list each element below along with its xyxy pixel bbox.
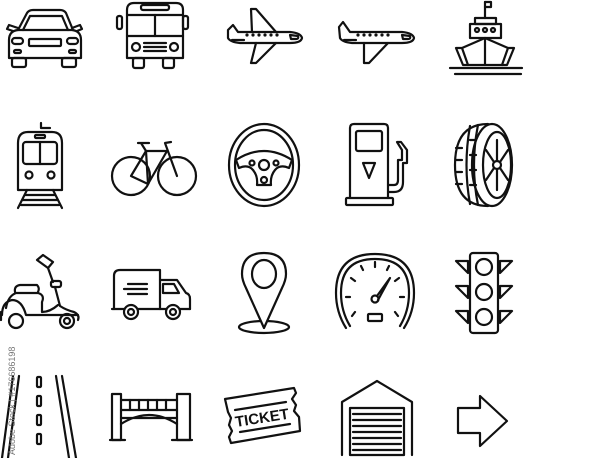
icon: fuel pump xyxy=(346,124,407,205)
icon: ticket: TICKET xyxy=(234,406,290,431)
icon: train xyxy=(18,123,62,208)
watermark text: Adobe Stock | #176686198 xyxy=(7,347,17,455)
icon: airplane 2 xyxy=(339,22,414,63)
icon: bus xyxy=(117,3,188,68)
icon: tire xyxy=(455,124,512,206)
icon: traffic light xyxy=(456,253,512,333)
icon: road xyxy=(2,376,76,458)
icon: airplane 1 xyxy=(228,9,302,63)
icon: bicycle xyxy=(112,142,196,195)
icon: car xyxy=(7,10,82,67)
icon: arrow xyxy=(458,396,507,446)
icon: location pin xyxy=(239,253,289,333)
icon: ship xyxy=(450,2,522,74)
icon: garage xyxy=(342,381,412,455)
icon: bridge xyxy=(110,394,192,440)
icon: scooter xyxy=(1,255,78,328)
icon: delivery truck xyxy=(112,270,190,319)
icon: steering wheel xyxy=(229,124,299,206)
icon: ticket xyxy=(225,388,300,443)
icon: speedometer xyxy=(336,254,414,328)
